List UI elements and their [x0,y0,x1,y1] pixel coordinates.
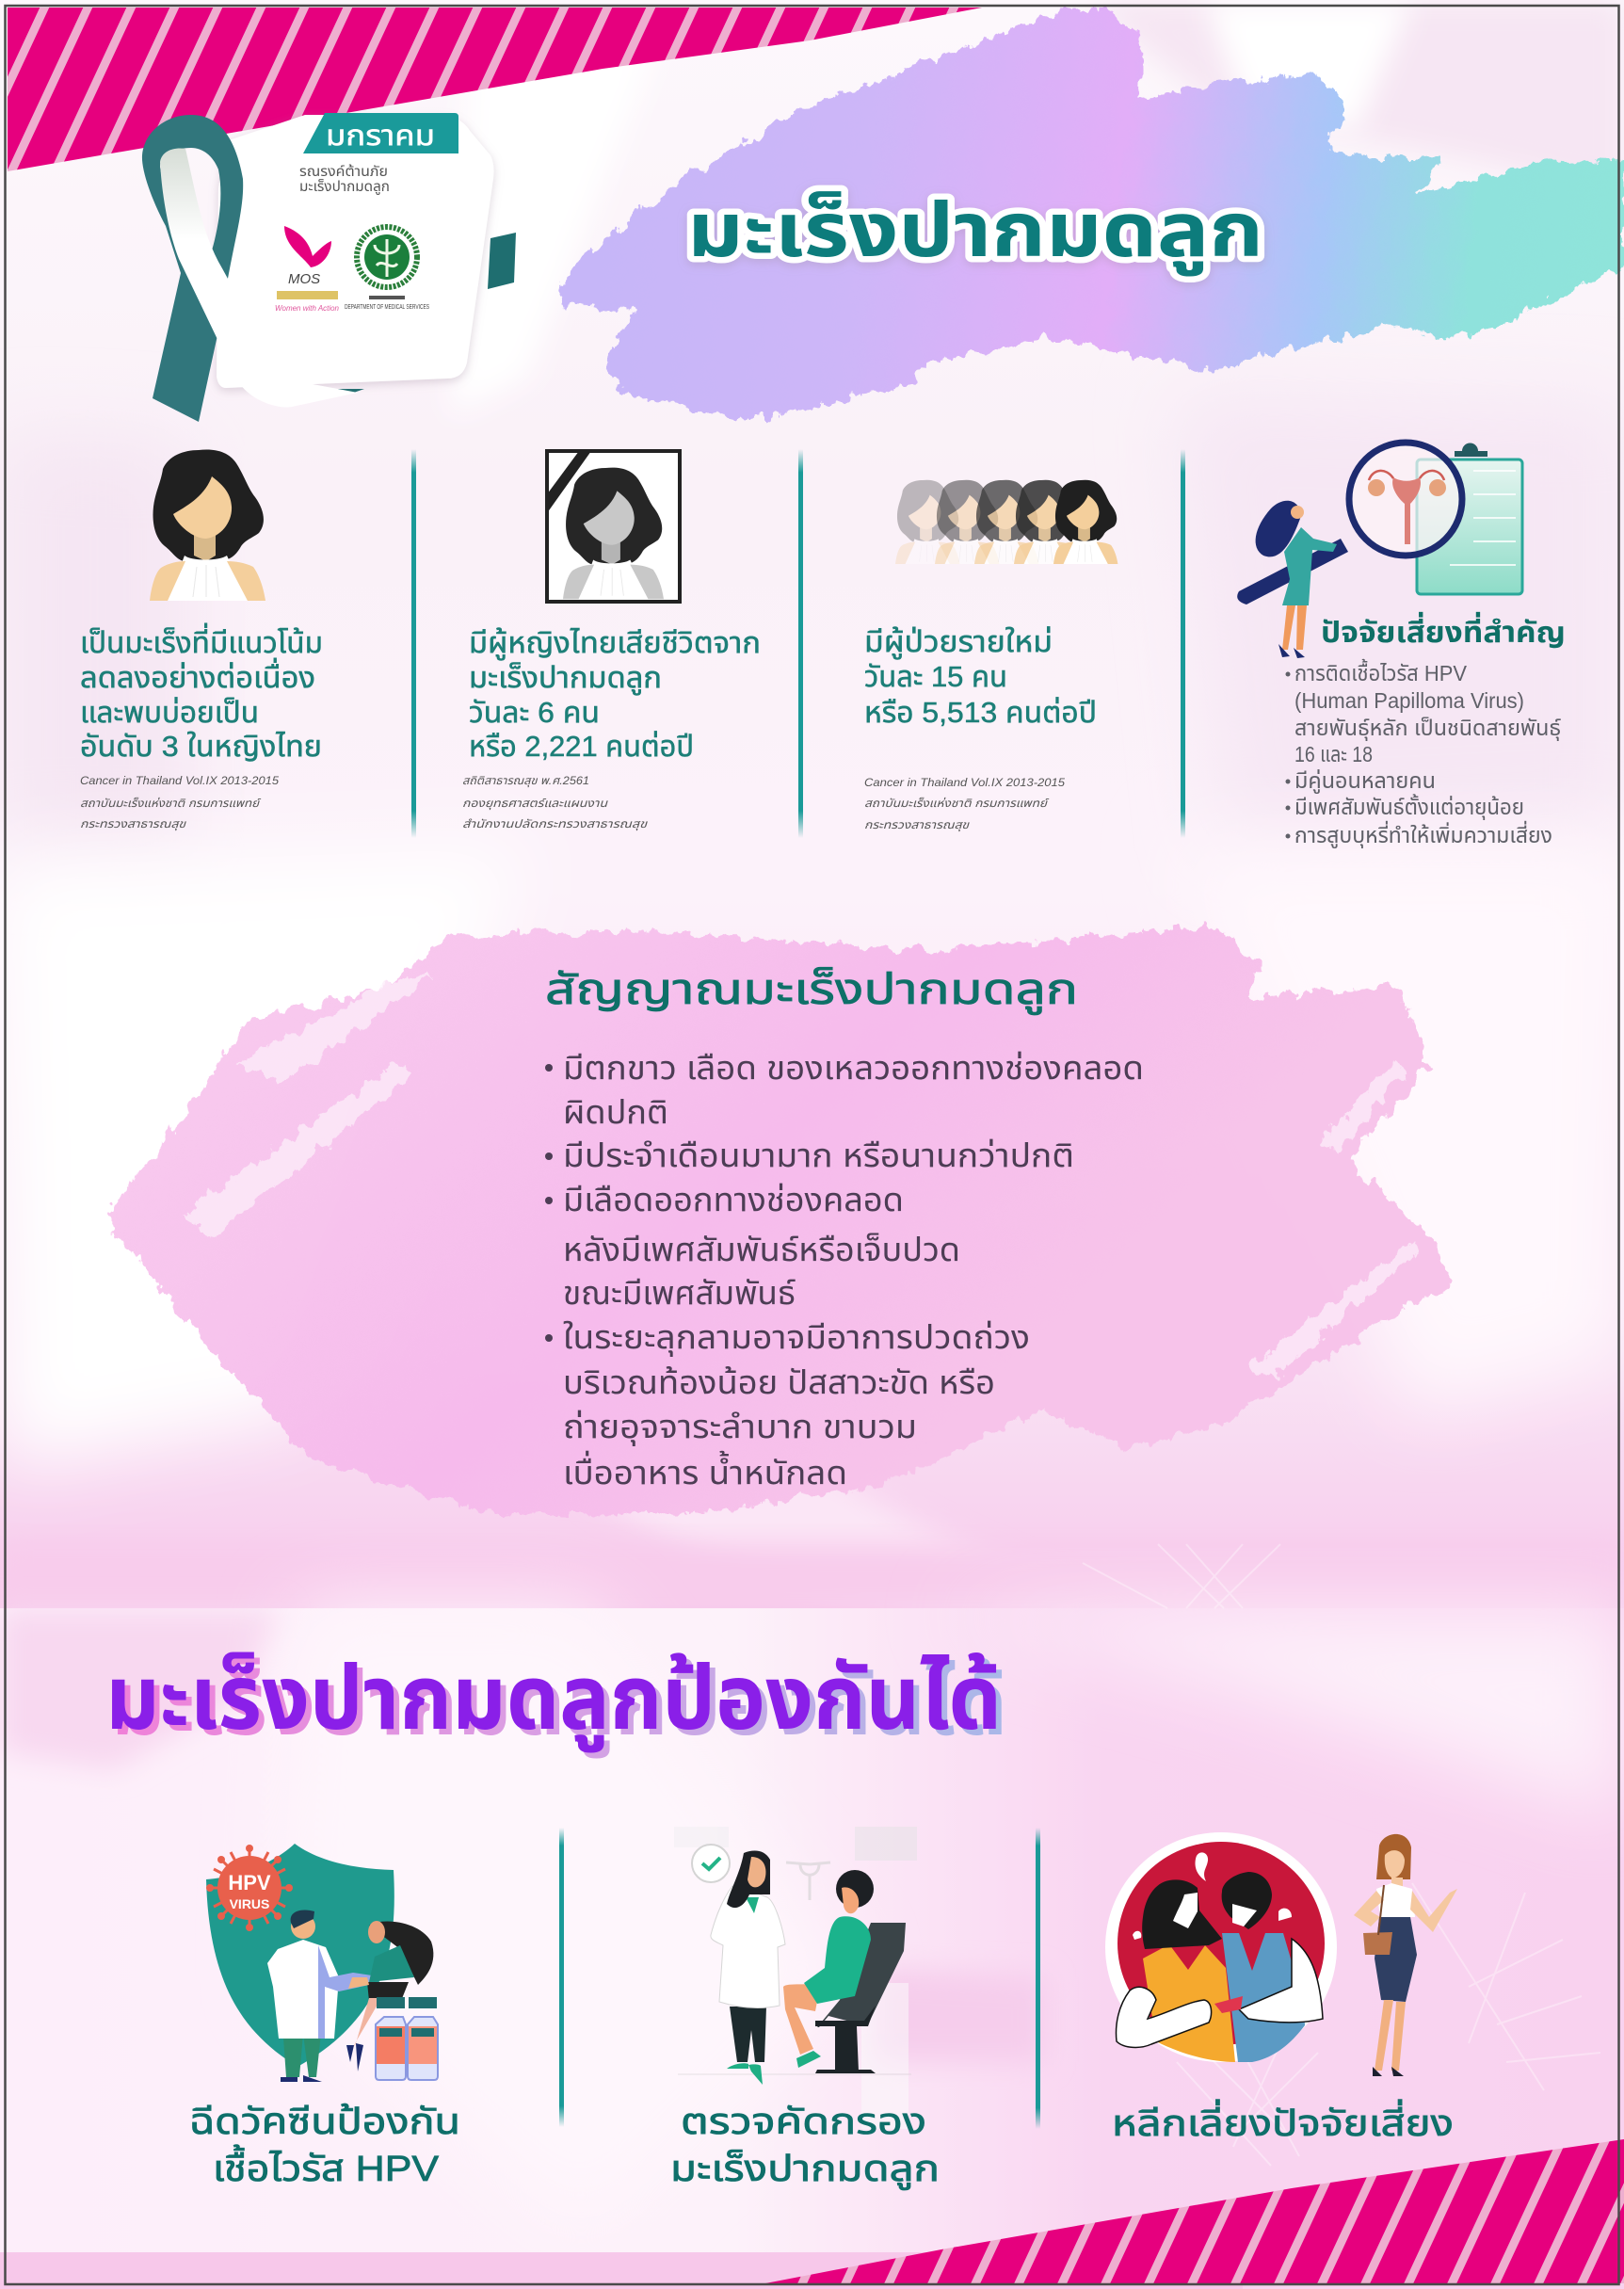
panel: statistic 1 trend [80,450,323,831]
statistic text: ลดลงอย่างต่อเนื่อง [80,657,315,694]
list of warning signs: มีเลือดออกทางช่องคลอด [563,1182,904,1218]
card [217,115,494,388]
caption: ตรวจคัดกรอง [681,2103,926,2142]
icon: row of women [895,480,1118,564]
source note [462,774,649,831]
heading: ปัจจัยเสี่ยงที่สำคัญ [1321,611,1566,649]
source note: สำนักงานปลัดกระทรวงสาธารณสุข [462,817,649,831]
statistic text [864,625,1097,729]
list of warning signs: มีตกขาว เลือด ของเหลวออกทางช่องคลอด [563,1050,1144,1087]
icon: clinic scene faded backdrop [674,1827,917,2129]
statistic text: และพบบ่อยเป็น [80,696,259,729]
list of warning signs: ผิดปกติ [563,1094,668,1131]
tab: month [303,113,458,153]
panel: statistic 3 new cases [864,480,1118,832]
heading: สัญญาณมะเร็งปากมดลูก [545,964,1078,1015]
heading: cervical cancer is preventable: มะเร็งปากมดลูกป้องกันได้ [105,1649,1002,1752]
risk factor list [1286,658,1561,849]
caption [670,2103,940,2190]
icon: awareness ribbon [142,115,358,422]
statistic text: มะเร็งปากมดลูก [469,661,662,695]
risk factor list: (Human Papilloma Virus) [1294,688,1524,713]
logo: pink heart: MOS [288,271,320,287]
risk factor list: การติดเชื้อไวรัส HPV [1294,658,1468,685]
top striped band [8,8,982,171]
icon: check bubble [692,1845,730,1882]
source note: สถาบันมะเร็งแห่งชาติ กรมการแพทย์ [864,797,1049,810]
source note [80,774,279,831]
icon: doctor [711,1851,785,2085]
icon: clipboard, magnifier and woman [1237,443,1522,658]
month label: มกราคม [326,121,435,152]
brush stroke: title background [560,9,1622,417]
risk factor list: มีเพศสัมพันธ์ตั้งแต่อายุน้อย [1294,793,1524,820]
risk factor list: สายพันธุ์หลัก เป็นชนิดสายพันธุ์ [1294,716,1561,741]
title: มะเร็งปากมดลูก [687,188,1263,276]
panel: ribbon campaign card: มะเร็งปากมดลูก [299,178,390,195]
statistic text: มีผู้หญิงไทยเสียชีวิตจาก [469,626,761,660]
statistic text: มีผู้ป่วยรายใหม่ [864,625,1053,659]
source note: กระทรวงสาธารณสุข [80,817,187,831]
list of warning signs: เบื่ออาหาร น้ำหนักลด [563,1450,847,1491]
statistic text: หรือ 5,513 คนต่อปี [864,696,1097,729]
logo: department seal [345,227,429,311]
panel: statistic 2 deaths [462,451,761,831]
icon: woman with handbag [1354,1834,1457,2076]
source note: สถิติสาธารณสุข พ.ศ.2561 [462,774,589,788]
icon: framed portrait with mourning ribbon [547,451,680,602]
list of warning signs: ในระยะลุกลามอาจมีอาการปวดถ่วง [563,1319,1030,1357]
heading: cervical cancer is preventable: มะเร็งปากมดลูกป้องกันได้ [111,1654,1007,1758]
icon: HPV virus: VIRUS [230,1896,269,1911]
source note: สถาบันมะเร็งแห่งชาติ กรมการแพทย์ [80,797,261,810]
source note: กองยุทธศาสตร์และแผนงาน [462,797,608,811]
icon: patient [346,1921,433,2071]
statistic text: วันละ 6 คน [469,696,600,729]
statistic text: หรือ 2,221 คนต่อปี [469,730,694,763]
icon: ribbon back tail [330,233,516,395]
panel: cervical screening [670,1827,940,2190]
caption: ฉีดวัคซีนป้องกัน [189,2103,460,2142]
icon: HPV virus [206,1845,293,1931]
risk factor list: 16 และ 18 [1294,742,1373,766]
bottom striped band [765,2139,1624,2283]
list of warning signs: ขณะมีเพศสัมพันธ์ [563,1275,796,1312]
icon: HPV virus: HPV [228,1871,271,1894]
logo: department seal: DEPARTMENT OF MEDICAL SERVICES [345,304,429,311]
statistic text: อันดับ 3 ในหญิงไทย [80,730,322,763]
icon: uterus [1368,471,1446,544]
statistic text: เป็นมะเร็งที่มีแนวโน้ม [80,622,323,659]
list of warning signs: บริเวณท้องน้อย ปัสสาวะขัด หรือ [563,1364,995,1401]
source note [864,776,1065,832]
panel: warning signs [545,964,1144,1491]
icon: couple in circle [1105,1832,1337,2062]
panel: ribbon campaign card [142,113,516,422]
icon: vaccine vials [376,1997,438,2080]
panel: key risk factors [1237,443,1566,849]
caption: เชื้อไวรัส HPV [213,2144,440,2189]
statistic text [469,626,761,763]
list of warning signs: มีประจำเดือนมามาก หรือนานกว่าปกติ [563,1137,1074,1174]
icon: doctor [267,1910,372,2082]
divider [798,449,803,838]
divider [559,1828,564,2127]
source note: Cancer in Thailand Vol.IX 2013-2015 [80,774,279,787]
divider [1181,449,1185,838]
list of warning signs [545,1050,1144,1491]
logo: pink heart [275,226,340,313]
statistic text [80,622,323,763]
panel: HPV vaccination [189,1844,460,2189]
icon: patient on exam chair [783,1870,906,2073]
caption: หลีกเลี่ยงปัจจัยเสี่ยง [1112,2099,1454,2144]
logo: pink heart: Women with Action [275,304,340,313]
statistic text: วันละ 15 คน [864,660,1007,693]
divider [1036,1828,1040,2129]
caption [189,2103,460,2189]
brush stroke: warning signs background [103,925,1453,1514]
panel: avoid risk factors [1105,1832,1457,2144]
divider [411,449,416,838]
icon: shield [206,1844,394,2067]
risk factor list: การสูบบุหรี่ทำให้เพิ่มความเสี่ยง [1294,820,1552,849]
list of warning signs: ถ่ายอุจจาระลำบาก ขาบวม [563,1409,917,1446]
caption: มะเร็งปากมดลูก [670,2150,940,2190]
icon: woman [150,450,265,601]
risk factor list: มีคู่นอนหลายคน [1294,768,1436,795]
source note: กระทรวงสาธารณสุข [864,818,971,832]
list of warning signs: หลังมีเพศสัมพันธ์หรือเจ็บปวด [563,1232,960,1268]
source note: Cancer in Thailand Vol.IX 2013-2015 [864,776,1065,789]
campaign text: รณรงค์ต้านภัย [299,164,388,180]
